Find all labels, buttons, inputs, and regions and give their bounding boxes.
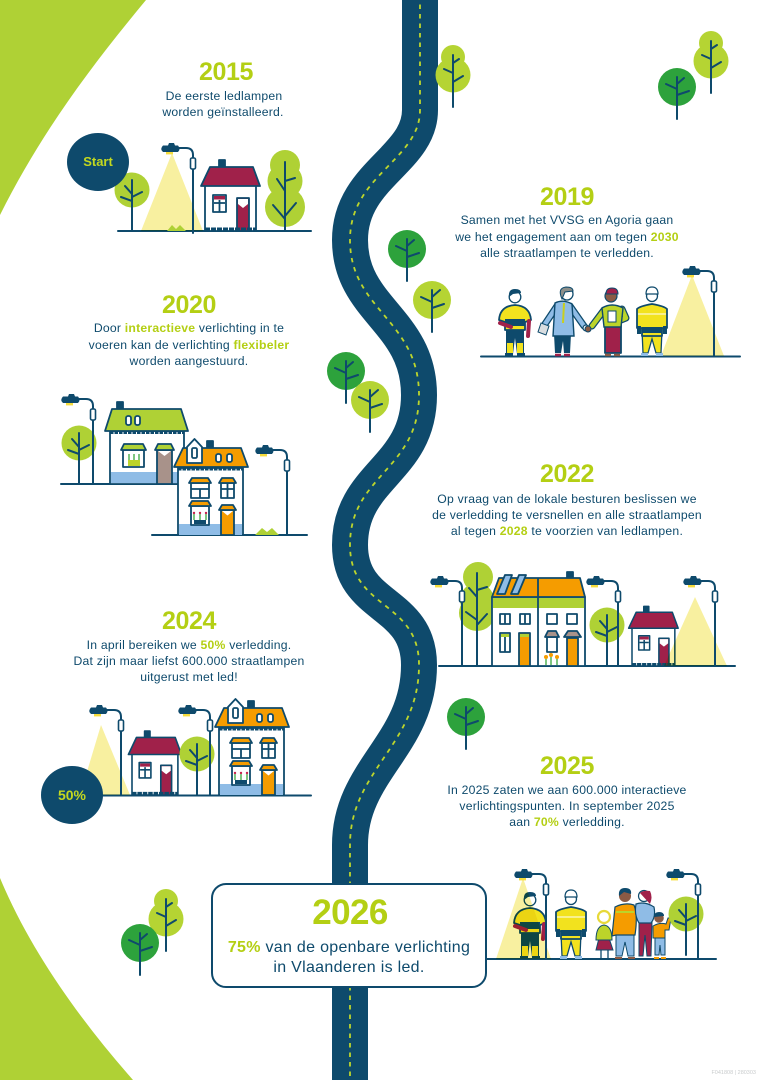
text: 2022: al tegen 2028 te voorzien van ledlampen. xyxy=(451,524,683,538)
text: 2019: alle straatlampen te verledden. xyxy=(480,246,654,260)
panel: 2024 xyxy=(41,607,311,824)
text: 2019: we het engagement aan om tegen 2030 xyxy=(455,230,679,244)
person: boy xyxy=(653,912,671,958)
winding road xyxy=(350,0,420,1080)
house: orange roof xyxy=(174,439,248,535)
text: 2024: Dat zijn maar liefst 600.000 straatlampen xyxy=(74,654,304,668)
text: 2025: aan 70% verledding. xyxy=(509,815,625,829)
heading: 2022: 2022 xyxy=(540,460,594,488)
panel: 2015 xyxy=(67,58,311,233)
decorative trees beside road middle xyxy=(327,352,389,432)
illustration: people and lamp 2019 xyxy=(481,266,740,356)
house: double house with solar panels xyxy=(492,572,585,666)
illustration: people and lamps 2025 xyxy=(486,869,716,959)
illustration: street 2015 xyxy=(114,143,311,233)
person: man in orange shirt xyxy=(612,888,636,958)
badge: Start xyxy=(67,133,129,191)
text: 2015: De eerste ledlampen xyxy=(166,89,282,103)
heading: 2024: 2024 xyxy=(162,607,217,635)
background: top-left green corner xyxy=(0,0,146,215)
house: green roof xyxy=(105,402,188,484)
text: 2015: worden geïnstalleerd. xyxy=(161,105,284,119)
person: worker xyxy=(499,289,531,356)
text: 2020: voeren kan de verlichting flexibeler xyxy=(89,338,289,352)
text: 2026: in Vlaanderen is led. xyxy=(273,959,425,976)
person: worker with helmet xyxy=(637,287,667,356)
decorative trees beside road upper xyxy=(388,230,451,332)
illustration: street 2020 xyxy=(61,394,307,535)
decorative trees top xyxy=(436,31,728,119)
person: woman xyxy=(635,890,655,956)
text: 2019: Samen met het VVSG en Agoria gaan xyxy=(461,213,673,227)
person: man in blue shirt xyxy=(538,287,589,355)
text: 2026: 75% van de openbare verlichting xyxy=(228,939,470,956)
panel: 2020 xyxy=(61,291,307,535)
heading: 2026: 2026 xyxy=(312,893,388,932)
badge: Start: Start xyxy=(83,154,113,169)
credit reference: F041808 | 280303 xyxy=(711,1070,756,1076)
tall tree xyxy=(459,562,495,666)
text: 2022: Op vraag van de lokale besturen beslissen we xyxy=(437,492,697,506)
illustration: street 2024 xyxy=(80,699,311,796)
person: girl xyxy=(596,911,613,958)
text: 2024: In april bereiken we 50% verledding. xyxy=(87,638,291,652)
text: 2022: de verledding te versnellen en alle straatlampen xyxy=(432,508,702,522)
panel: 2026 callout xyxy=(212,884,486,987)
heading: 2020: 2020 xyxy=(162,291,216,319)
text: 2020: worden aangestuurd. xyxy=(129,354,248,368)
illustration: street 2022 xyxy=(430,562,735,666)
person: worker under lamp xyxy=(514,892,546,959)
panel: 2025 xyxy=(447,752,716,959)
decorative tree beside road lower xyxy=(447,698,485,749)
heading: 2019: 2019 xyxy=(540,183,594,211)
badge: 50% xyxy=(41,766,103,824)
heading: 2015: 2015 xyxy=(199,58,254,86)
badge: 50%: 50% xyxy=(58,787,87,803)
background: bottom-left green corner xyxy=(0,878,133,1080)
text: 2024: uitgerust met led! xyxy=(140,670,238,684)
text: 2025: verlichtingspunten. In september 2025 xyxy=(459,799,675,813)
person: worker with helmet xyxy=(556,890,586,959)
text: 2025: In 2025 zaten we aan 600.000 interactieve xyxy=(447,783,687,797)
decorative trees bottom left xyxy=(121,889,184,975)
panel: 2019 xyxy=(454,183,740,356)
panel: 2022 xyxy=(430,460,735,666)
person: woman with clipboard xyxy=(585,288,626,355)
heading: 2025: 2025 xyxy=(540,752,595,780)
text: 2020: Door interactieve verlichting in te xyxy=(94,321,284,335)
